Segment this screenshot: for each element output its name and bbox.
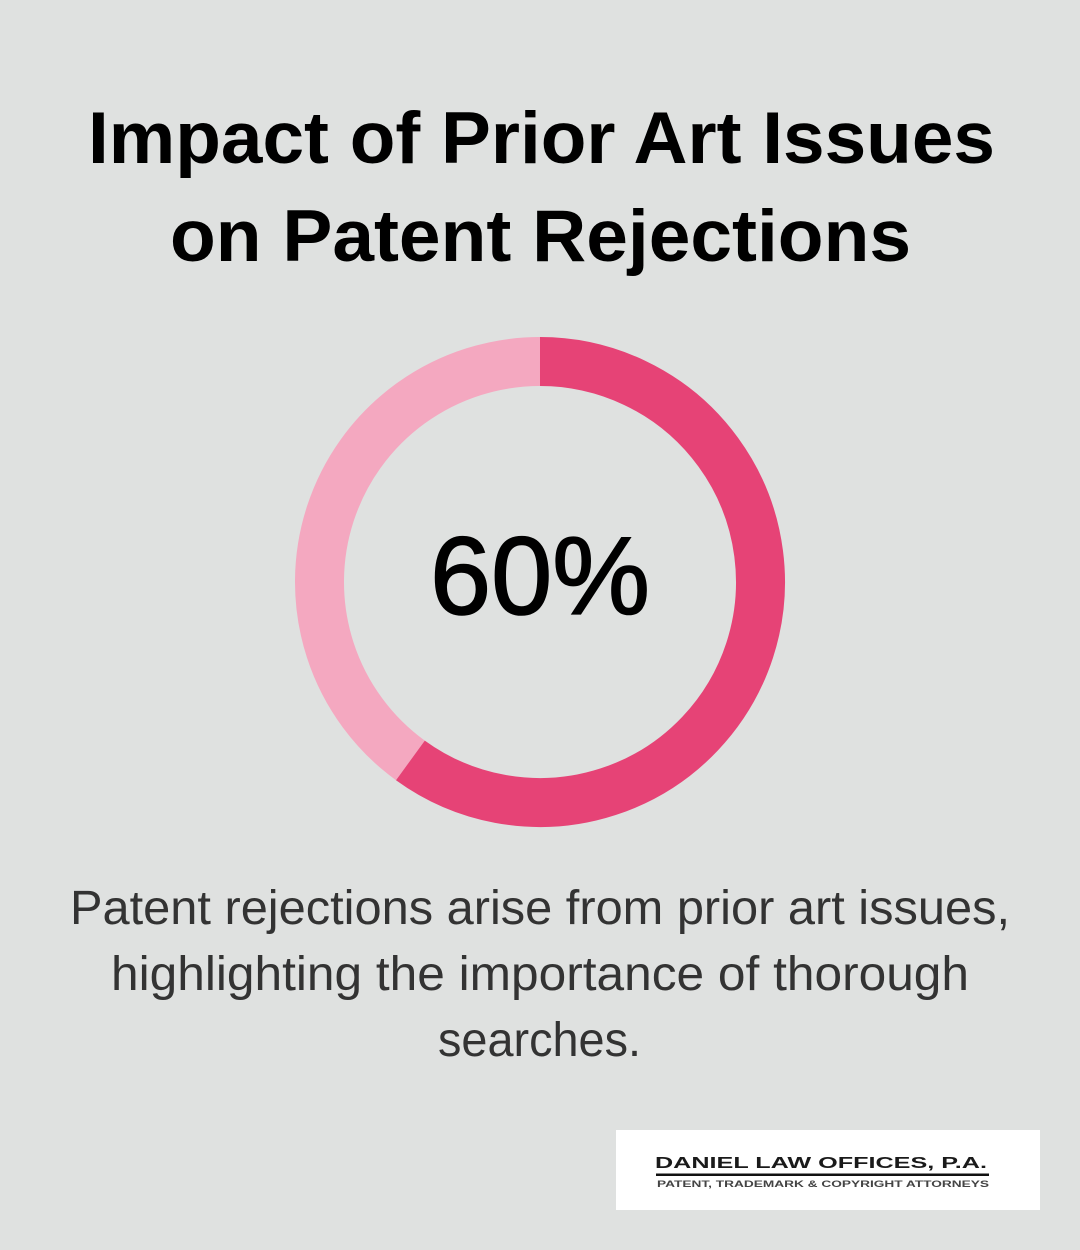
title: Impact of Prior Art Issues [88,98,995,179]
donut chart: 60% [319,362,760,802]
logo: Daniel Law Offices: PATENT, TRADEMARK & COPYRIGHT ATTORNEYS [657,1179,989,1190]
description text [70,882,1010,1067]
title: on Patent Rejections [170,196,911,277]
ring segment: highlighted 60% [410,362,760,802]
logo: Daniel Law Offices [616,1130,1040,1210]
ring segment: remaining 40% [319,362,540,760]
title [88,98,995,277]
description text: Patent rejections arise from prior art issues, [70,882,1010,935]
logo: Daniel Law Offices: DANIEL LAW OFFICES, P.A. [655,1155,987,1172]
donut value: 60% [430,515,650,638]
description text: highlighting the importance of thorough [111,948,969,1001]
description text: searches. [438,1014,641,1067]
